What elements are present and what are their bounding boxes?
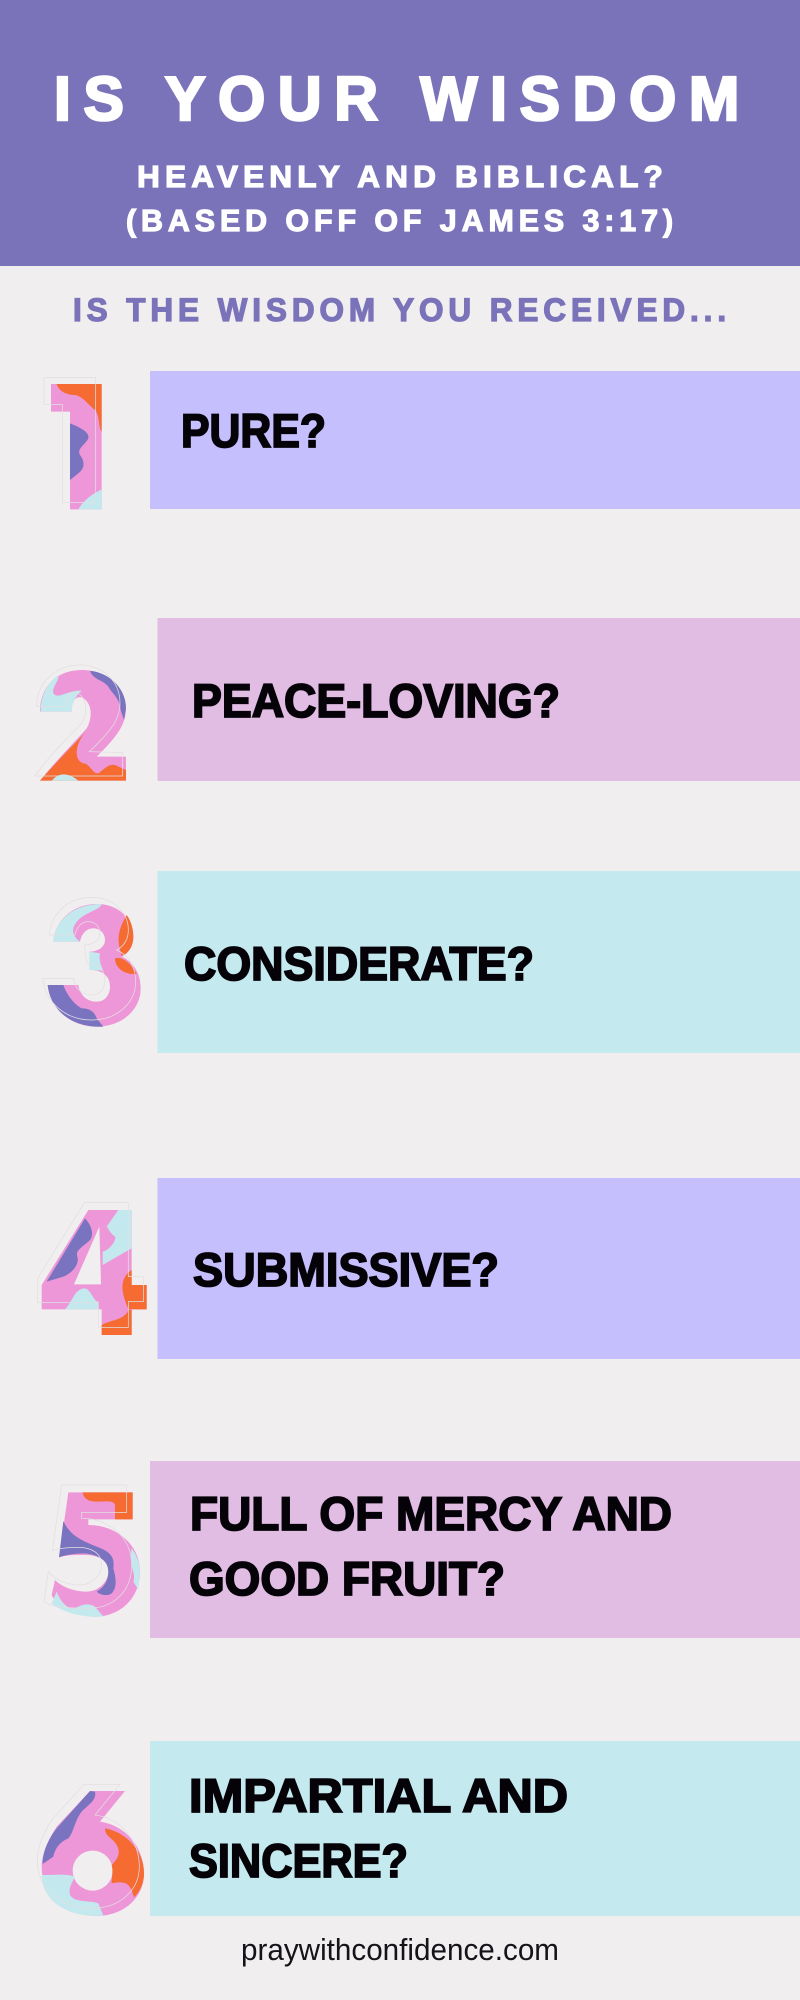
subtitle line 1: HEAVENLY AND BIBLICAL? [137,159,668,194]
title: IS YOUR WISDOM [54,65,752,134]
icon: numeral 6 [37,1784,144,1916]
label: pure: PURE? [181,404,326,457]
label: sincere: SINCERE? [189,1834,408,1887]
header banner [0,0,800,266]
label: impartial and: IMPARTIAL AND [189,1769,568,1822]
panel: item 6 impartial and sincere [150,1741,800,1916]
subtitle line 2: (BASED OFF OF JAMES 3:17) [126,203,678,238]
section heading: IS THE WISDOM YOU RECEIVED... [73,292,731,328]
icon: numeral 4 [38,1203,147,1335]
panel: item 1 pure [150,371,800,509]
footer url: praywithconfidence.com [241,1932,559,1967]
label: peace-loving: PEACE-LOVING? [192,674,560,727]
label: submissive: SUBMISSIVE? [193,1243,499,1296]
icon: numeral 1 [44,377,102,509]
panel: item 3 considerate [158,871,800,1053]
icon: numeral 2 [35,665,126,781]
label: considerate: CONSIDERATE? [184,937,534,990]
label: good fruit: GOOD FRUIT? [189,1552,505,1605]
panel: item 4 submissive [158,1178,800,1359]
icon: numeral 5 [44,1485,140,1617]
icon: numeral 3 [43,897,141,1027]
panel: item 5 mercy and good fruit [150,1461,800,1638]
label: full of mercy and: FULL OF MERCY AND [190,1487,672,1540]
panel: item 2 peace-loving [158,618,800,781]
